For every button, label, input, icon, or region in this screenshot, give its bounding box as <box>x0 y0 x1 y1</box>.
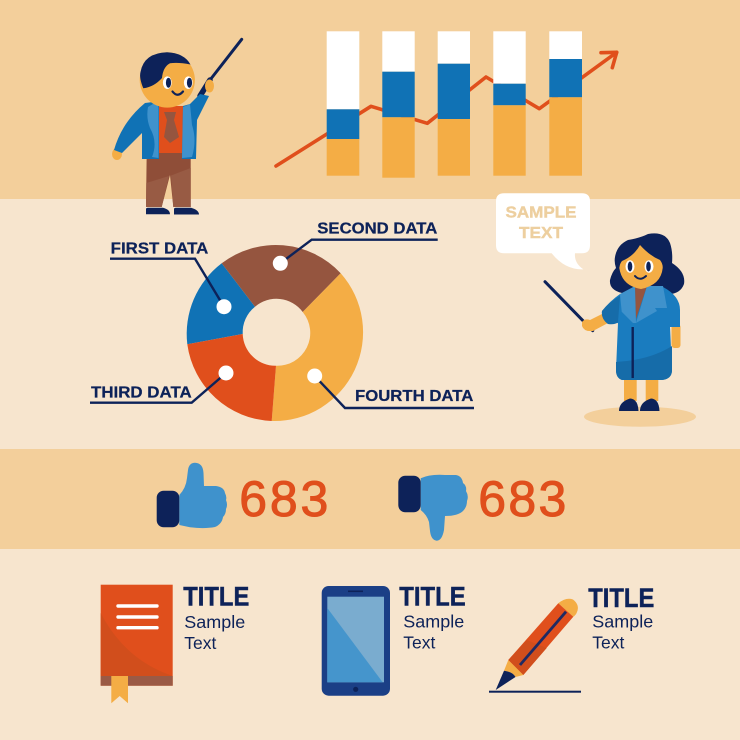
likes count: 683 <box>239 471 328 527</box>
neck <box>635 286 647 319</box>
stacked bar chart <box>327 31 582 178</box>
bar 2 <box>382 31 415 178</box>
jacket <box>114 94 209 159</box>
head <box>140 52 195 108</box>
tie <box>164 112 179 143</box>
hair <box>610 233 684 294</box>
panel: reactions band <box>0 449 740 549</box>
legs <box>624 378 658 401</box>
text: book title: Text <box>184 633 217 653</box>
panel: top band <box>0 0 740 199</box>
shirt <box>154 106 186 153</box>
callout: second data <box>273 220 438 271</box>
hair <box>140 52 190 88</box>
left hand <box>112 148 122 160</box>
coat placket <box>632 327 634 378</box>
eyes <box>163 76 193 89</box>
lapels <box>620 286 667 323</box>
right hand <box>205 80 214 92</box>
text: pencil title: TITLE <box>588 583 654 613</box>
trend line with arrow <box>276 52 617 166</box>
pointer stick <box>545 282 593 331</box>
callout: second data: SECOND DATA <box>317 220 438 237</box>
jacket lapels <box>147 102 194 158</box>
man with pointer <box>112 39 242 214</box>
callout: first data: FIRST DATA <box>111 240 209 257</box>
left sleeve <box>602 296 620 324</box>
dislikes count: 683 <box>478 471 566 527</box>
slice: third data <box>187 334 276 421</box>
callout: third data: THIRD DATA <box>91 385 192 402</box>
trousers shade <box>146 168 191 207</box>
callout: first data <box>110 240 232 314</box>
icon: book <box>101 585 173 703</box>
smile <box>635 276 646 279</box>
speech bubble: TEXT <box>519 225 563 242</box>
bar 3 <box>438 31 470 176</box>
text: pencil title: Text <box>592 632 625 652</box>
thumbs down icon <box>398 475 468 541</box>
icon: pencil <box>489 599 581 693</box>
text: pencil title <box>588 583 654 652</box>
thumbs up icon <box>157 463 227 528</box>
smile <box>172 92 183 95</box>
bar 1 <box>327 31 359 176</box>
text: book title <box>183 582 249 653</box>
slice: first data <box>187 263 255 344</box>
face <box>619 245 663 289</box>
bar 4 <box>493 31 526 176</box>
coat <box>602 287 680 380</box>
text: book title: Sample <box>184 612 245 632</box>
text: tablet title: TITLE <box>399 582 466 612</box>
slice: fourth data <box>272 273 363 421</box>
coat lower shade <box>616 346 672 380</box>
ground shadow <box>584 407 696 427</box>
icon: tablet <box>322 586 390 696</box>
text: book title: TITLE <box>183 582 249 612</box>
text: tablet title: Text <box>403 632 436 652</box>
callout: third data <box>90 366 234 403</box>
left arm and hand <box>582 313 608 331</box>
shoes <box>146 208 199 214</box>
speech bubble: SAMPLE <box>506 204 577 222</box>
woman with pointer <box>545 233 696 427</box>
eyes <box>626 260 654 273</box>
callout: fourth data: FOURTH DATA <box>355 388 474 405</box>
right arm <box>672 324 680 348</box>
bar 5 <box>549 31 582 176</box>
slice: second data <box>222 245 341 312</box>
shoes <box>619 398 660 411</box>
text: tablet title: Sample <box>403 611 464 631</box>
text: pencil title: Sample <box>592 611 653 631</box>
trousers <box>146 152 191 207</box>
speech bubble <box>496 193 590 269</box>
donut chart <box>187 245 363 421</box>
pointer stick <box>200 39 242 96</box>
text: tablet title <box>399 582 466 652</box>
callout: fourth data <box>307 368 474 408</box>
